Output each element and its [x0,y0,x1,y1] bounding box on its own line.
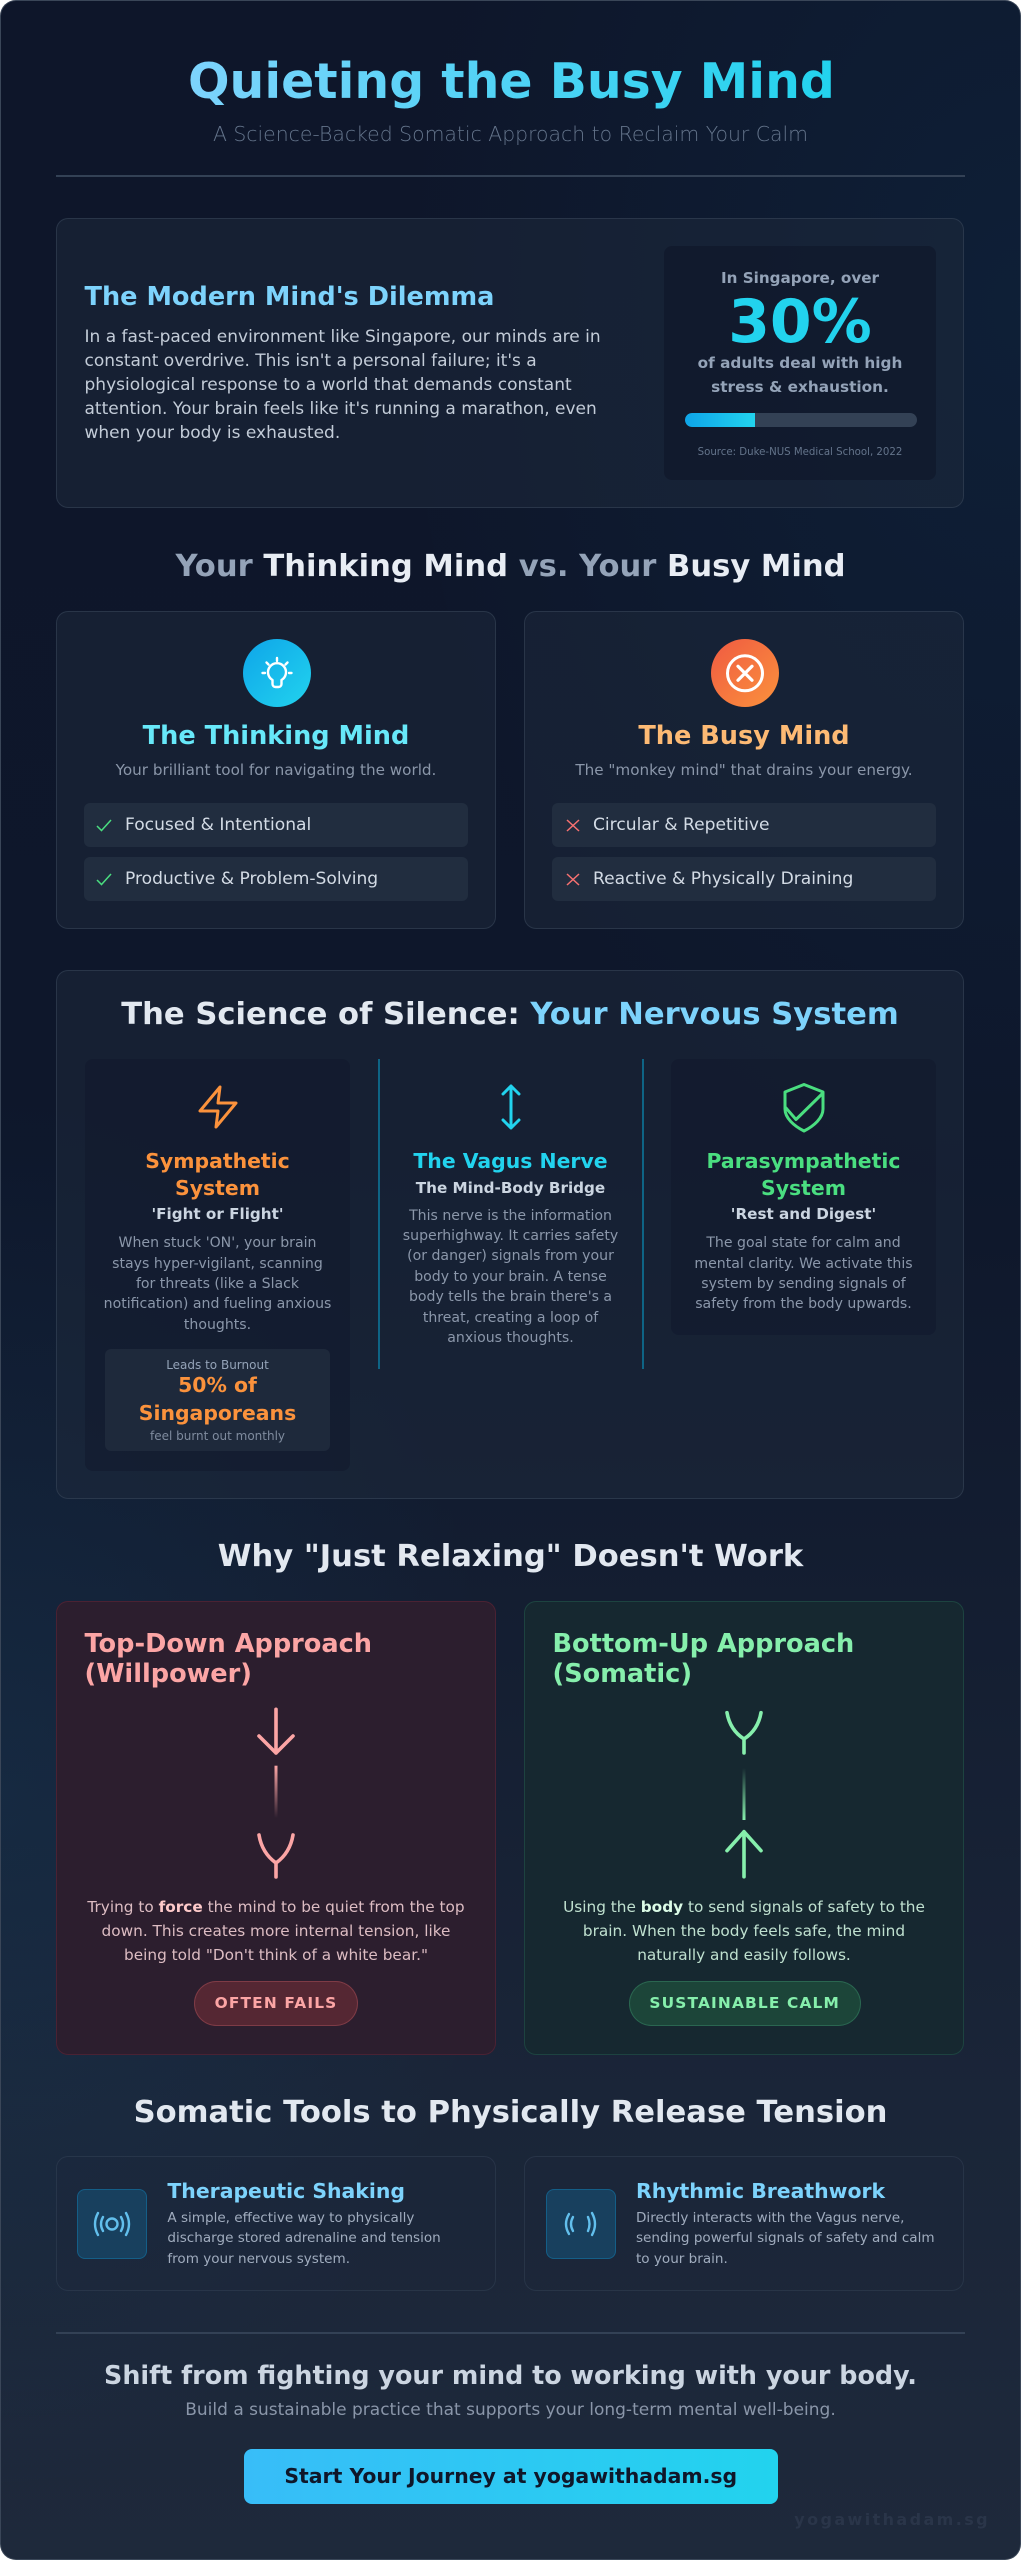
column description [403,1208,618,1346]
burnout figure: 50% of [178,1373,257,1397]
icon: shield with check [784,1083,825,1132]
icon: vertical double arrow [501,1084,520,1130]
title: Quieting the Busy Mind [188,53,835,110]
column title: The Vagus Nerve [413,1149,608,1173]
list item: focused [84,803,468,847]
card title [552,1629,854,1689]
burnout figure: Singaporeans [139,1401,296,1425]
text: dilemma paragraph: constant overdrive. This isn't a personal failure; it's a [84,351,537,371]
card title: (Willpower) [84,1659,252,1689]
column description: for threats (like a Slack [136,1276,299,1292]
column description: body to your brain. A tense [414,1269,607,1285]
panel: bottom-up approach [524,1601,964,2055]
heading: why just relaxing doesn't work: Why "Just Relaxing" Doesn't Work [218,1539,803,1574]
panel: rhythmic breathwork [524,2156,964,2291]
heading: science of silence: The Science of Silence: Your Nervous System [121,997,899,1032]
stat number: 30% [728,287,872,357]
column description: mental clarity. We activate this [694,1256,913,1272]
heading: thinking vs busy: Your Thinking Mind vs. Your Busy Mind [175,549,846,584]
column tagline: 'Rest and Digest' [731,1205,876,1223]
badge: often fails [194,1981,358,2026]
column title: System [175,1176,260,1200]
approach description: down. This creates more internal tension, like [102,1922,450,1940]
panel: therapeutic shaking [56,2156,496,2291]
text: dilemma paragraph: physiological response to a world that demands constant [84,375,572,395]
column description [104,1235,331,1333]
list item: circular: Circular & Repetitive [593,815,770,835]
approach description: Using the body to send signals of safety to the [563,1898,925,1916]
tool title: Therapeutic Shaking [167,2179,405,2203]
column description [694,1235,913,1312]
column title [707,1149,900,1200]
column description: stays hyper-vigilant, scanning [112,1256,323,1272]
column description: This nerve is the information [409,1208,612,1224]
burnout note: feel burnt out monthly [150,1429,285,1443]
panel: science of silence [56,970,964,1499]
burnout label: Leads to Burnout [166,1358,269,1372]
badge: sustainable calm: SUSTAINABLE CALM [649,1994,840,2012]
column: parasympathetic system [671,1059,936,1335]
call-to-action button [244,2449,778,2504]
icon: shaking waves [77,2189,147,2259]
closing heading: Shift from fighting your mind to working with your body. [104,2360,917,2390]
card title: The Thinking Mind [143,721,409,751]
card title: Bottom-Up Approach [552,1629,854,1659]
column description: When stuck 'ON', your brain [119,1235,316,1251]
tool description: discharge stored adrenaline and tension [167,2230,441,2246]
column description: body tells the brain there's a [409,1289,612,1305]
panel: modern mind's dilemma [56,218,964,508]
subtitle: A Science-Backed Somatic Approach to Reclaim Your Calm [213,122,808,146]
column: vagus nerve [378,1059,644,1369]
column description: superhighway. It carries safety [403,1228,618,1244]
column description: anxious thoughts. [447,1330,574,1346]
column description: (or danger) signals from your [407,1248,614,1264]
icon: lightbulb [243,639,311,707]
tool description: Directly interacts with the Vagus nerve, [636,2210,904,2226]
approach description: being told "Don't think of a white bear." [124,1946,428,1964]
progress bar [685,413,917,427]
column tagline: 'Fight or Flight' [151,1205,284,1223]
stat box: 30 percent [664,246,936,480]
column tagline: The Mind-Body Bridge [416,1179,605,1197]
column description: The goal state for calm and [706,1235,901,1251]
column description: threat, creating a loop of [423,1310,598,1326]
text: dilemma paragraph: attention. Your brain feels like it's running a marathon, even [84,399,597,419]
column title: Sympathetic [145,1149,290,1173]
approach description: naturally and easily follows. [637,1946,851,1964]
badge: often fails: OFTEN FAILS [215,1994,337,2012]
stat description [698,354,902,396]
approach description [87,1898,465,1964]
heading: somatic tools: Somatic Tools to Physically Release Tension [134,2094,887,2130]
column description: thoughts. [184,1317,251,1333]
closing subtext: Build a sustainable practice that supports your long-term mental well-being. [185,2400,836,2420]
heading: dilemma: The Modern Mind's Dilemma [84,282,494,312]
card subtitle: The "monkey mind" that drains your energy. [575,761,913,779]
badge: sustainable calm [629,1981,861,2026]
column title: Parasympathetic [707,1149,900,1173]
burnout stat callout [105,1349,330,1451]
list item: productive [84,857,468,901]
diagram: bottom-up arrows [725,1710,763,1878]
approach description: Trying to force the mind to be quiet from the top [87,1898,465,1916]
card title: The Busy Mind [638,721,850,751]
tool description: A simple, effective way to physically [167,2210,414,2226]
approach description: brain. When the body feels safe, the mind [583,1922,905,1940]
tool description [636,2210,935,2267]
text: dilemma paragraph: In a fast-paced environment like Singapore, our minds are in [84,327,601,347]
tool description: from your nervous system. [167,2251,350,2267]
list item: focused: Focused & Intentional [125,815,311,835]
diagram: top-down arrows [257,1708,295,1879]
stat lead-in: In Singapore, over [721,268,879,286]
column description: notification) and fueling anxious [104,1296,331,1312]
tool description: to your brain. [636,2251,728,2267]
approach description [563,1898,925,1964]
stat description: stress & exhaustion. [711,378,889,396]
tool description: sending powerful signals of safety and calm [636,2230,935,2246]
tool description [167,2210,441,2267]
stat description: of adults deal with high [698,354,902,372]
panel: the busy mind [524,611,964,929]
panel: the thinking mind [56,611,496,929]
column description: safety from the body upwards. [695,1296,912,1312]
panel: top-down approach [56,1601,496,2055]
column description: system by sending signals of [701,1276,906,1292]
list item: circular [552,803,936,847]
card subtitle: Your brilliant tool for navigating the world. [116,761,436,779]
icon: lightning bolt [198,1086,238,1128]
burnout figure [139,1373,296,1425]
text: dilemma paragraph: when your body is exhausted. [84,423,340,443]
column title: System [761,1176,846,1200]
column: sympathetic system [85,1059,350,1471]
list item: reactive [552,857,936,901]
card title: (Somatic) [552,1659,692,1689]
icon: breath waves [546,2189,616,2259]
card title [84,1629,372,1689]
text: dilemma paragraph [84,327,601,443]
source note: Source: Duke-NUS Medical School, 2022 [698,447,902,458]
tool title: Rhythmic Breathwork [636,2179,885,2203]
card title: Top-Down Approach [84,1629,372,1659]
list item: reactive: Reactive & Physically Draining [593,869,853,889]
icon: x in circle [710,639,778,707]
column title [145,1149,290,1200]
list item: productive: Productive & Problem-Solving [125,869,378,889]
watermark: yogawithadam.sg [794,2510,990,2529]
call-to-action button: Start Your Journey at yogawithadam.sg [284,2464,737,2488]
